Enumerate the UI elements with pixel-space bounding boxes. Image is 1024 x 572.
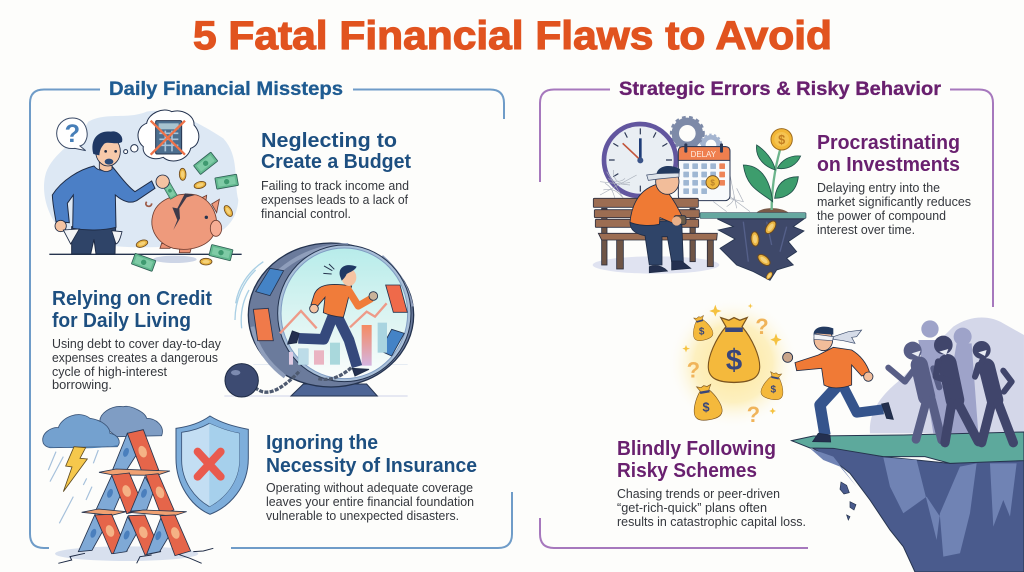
heading: ignoring insurance: Necessity of Insurance (266, 455, 477, 477)
heading: procrastinating on investments (817, 132, 960, 176)
text: procrastinating description: market significantly reduces (817, 195, 971, 209)
illustration: hamster wheel with ball and chain (224, 243, 414, 397)
text: procrastinating description: Delaying entry into the (817, 181, 940, 195)
text: budget description: Failing to track income and (261, 179, 409, 193)
heading: procrastinating on investments: on Investments (817, 154, 960, 176)
storm clouds (100, 406, 162, 437)
text: credit description: cycle of high-interest (52, 365, 167, 379)
bill in pig and hand (163, 182, 177, 199)
clock (604, 124, 676, 196)
hands and pockets (55, 220, 66, 232)
heading: procrastinating on investments: Procrastinating (817, 132, 960, 154)
heading: relying on credit: for Daily Living (52, 310, 191, 332)
plant (757, 208, 788, 212)
illustration: runner chasing money bags off a cliff with shadow crowd (668, 298, 1024, 572)
heading: blindly following risky schemes: Blindly Following (617, 438, 776, 460)
heading: blindly following risky schemes (617, 438, 776, 482)
text: procrastinating description (817, 181, 971, 237)
ground and pit (717, 219, 804, 280)
illustration: blindfolded man on bench, clock, calendar and plant: $ (778, 133, 785, 147)
text: procrastinating description: interest over time. (817, 223, 915, 237)
money bags (708, 318, 760, 382)
heading: blindly following risky schemes: Risky Schemes (617, 460, 757, 482)
question marks: ? (687, 357, 700, 382)
text: budget description (261, 179, 409, 221)
title: 5 Fatal Financial Flaws to Avoid (193, 14, 832, 58)
cliff (792, 441, 1024, 572)
text: risky schemes description: “get-rich-quick” plans often (617, 501, 767, 515)
heading: neglecting to create a budget (261, 130, 411, 173)
heading: ignoring insurance (266, 432, 477, 477)
illustration: runner chasing money bags off a cliff with shadow crowd: $ (726, 344, 742, 377)
cobwebs (600, 170, 750, 212)
text: credit description: borrowing. (52, 378, 112, 392)
panel heading: daily financial missteps: Daily Financial Missteps (109, 78, 343, 100)
money (193, 152, 218, 175)
question marks (687, 314, 769, 427)
heading: neglecting to create a budget: Create a Budget (261, 151, 411, 173)
illustration: blindfolded man on bench, clock, calendar and plant (593, 117, 806, 280)
text: credit description: expenses creates a dangerous (52, 351, 218, 365)
text: risky schemes description: Chasing trends or peer-driven (617, 487, 780, 501)
text: insurance description: vulnerable to unexpected disasters. (266, 509, 459, 523)
ball and chain (255, 371, 300, 392)
text: insurance description: Operating without adequate coverage (266, 481, 473, 495)
front shadow figures (888, 336, 1013, 443)
panel heading: strategic errors: Strategic Errors & Risky Behavior (619, 78, 941, 100)
shield (176, 416, 248, 514)
piggy bank (146, 202, 152, 206)
sweater (52, 166, 155, 230)
heading: relying on credit (52, 288, 212, 332)
panel: strategic errors and risky behavior (540, 78, 1024, 572)
text: procrastinating description: the power of compound (817, 209, 946, 223)
runner (820, 385, 838, 435)
thought and question bubbles (138, 110, 199, 161)
sparkles (682, 303, 782, 414)
bench (593, 198, 717, 269)
heading: neglecting to create a budget: Neglecting to (261, 130, 397, 152)
rim cards (253, 268, 407, 356)
text: budget description: financial control. (261, 207, 351, 221)
calendar (678, 147, 730, 201)
text: insurance description: leaves your entire financial foundation (266, 495, 474, 509)
illustration: man with broken piggy bank: ? (65, 120, 80, 148)
chart in wheel (289, 352, 293, 365)
heading: relying on credit: Relying on Credit (52, 288, 212, 310)
crowd backdrop (870, 317, 1024, 433)
pants (72, 227, 116, 254)
panel: daily financial missteps (30, 78, 512, 563)
illustration: runner chasing money bags off a cliff with shadow crowd: $ (699, 327, 705, 338)
illustration: blindfolded man on bench, clock, calendar and plant: $ (710, 178, 715, 187)
illustration: house of cards, storm and broken shield (43, 406, 248, 563)
illustration: man with broken piggy bank (44, 110, 242, 271)
gears (675, 121, 699, 145)
text: risky schemes description: results in catastrophic capital loss. (617, 515, 806, 529)
text: insurance description (266, 481, 474, 523)
text: credit description: Using debt to cover day-to-day (52, 337, 222, 351)
illustration: runner chasing money bags off a cliff with shadow crowd: $ (702, 400, 710, 414)
heading: ignoring insurance: Ignoring the (266, 432, 378, 454)
illustration: runner chasing money bags off a cliff with shadow crowd: $ (771, 385, 777, 396)
sitting man (630, 220, 683, 265)
house of cards (78, 430, 191, 556)
illustration: blindfolded man on bench, clock, calendar and plant: DELAY (691, 150, 717, 159)
text: credit description (52, 337, 222, 392)
text: risky schemes description (617, 487, 806, 529)
runner (298, 315, 333, 339)
text: budget description: expenses leads to a lack of (261, 193, 408, 207)
question marks: ? (755, 314, 769, 339)
question marks: ? (747, 402, 760, 427)
head (99, 160, 112, 172)
